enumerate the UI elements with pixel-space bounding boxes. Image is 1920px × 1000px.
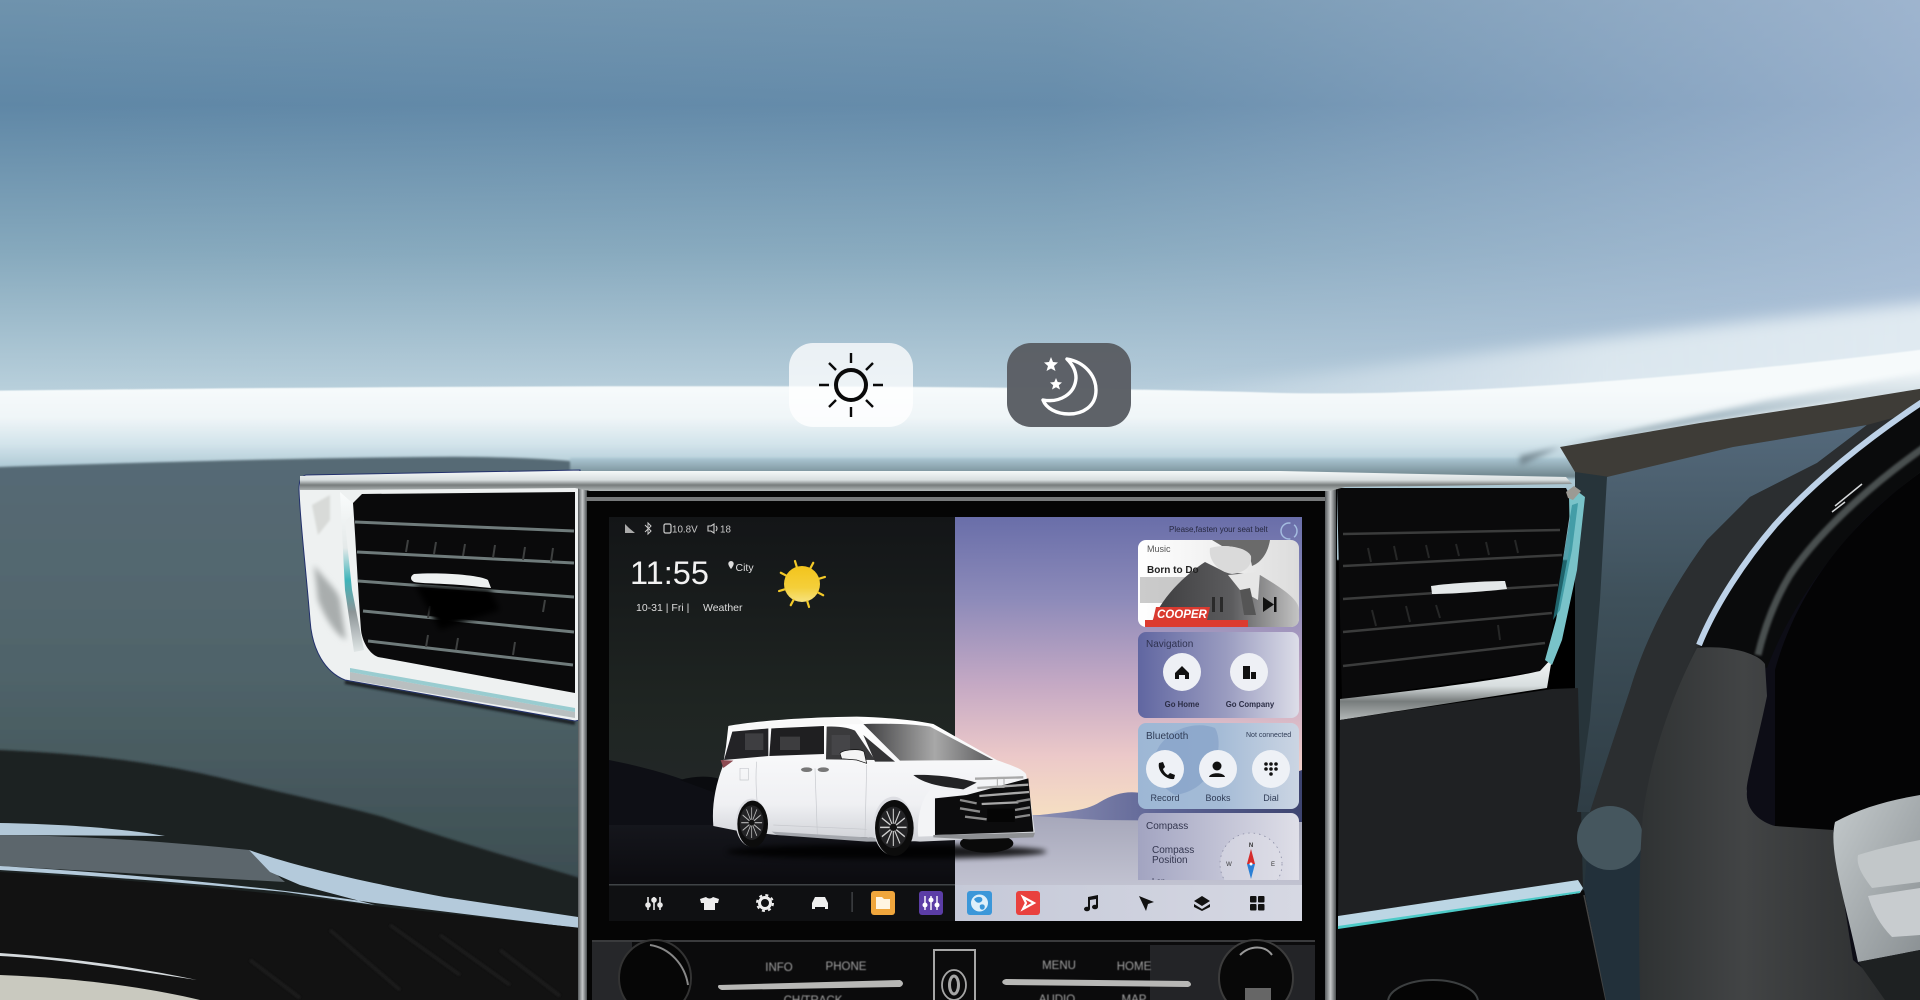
- icon: car: [812, 897, 828, 909]
- icon: weather sun: [779, 561, 825, 607]
- right knob: [1219, 940, 1293, 1000]
- small lower knob: [1388, 980, 1478, 1000]
- night mode button: [1007, 343, 1131, 427]
- car wheels: [736, 797, 914, 856]
- compass dial: [1220, 832, 1282, 880]
- sky background: [0, 0, 1920, 420]
- wheel shadow: [1590, 402, 1920, 900]
- go company button: [1226, 653, 1275, 709]
- dock: right icons: [967, 891, 1264, 915]
- icon: sun: [819, 353, 883, 417]
- chrome top strip: [300, 471, 1572, 491]
- left knob: [619, 940, 691, 1000]
- panel: compass card: Compass: [1152, 845, 1194, 856]
- icon: grid: [1250, 896, 1264, 910]
- status bar: 10.8V: [672, 524, 698, 536]
- far front wheel: [960, 834, 1013, 853]
- button labels: PHONE: [826, 961, 867, 973]
- wheel grip: [1639, 647, 1900, 1000]
- icon: navigation arrow: [1139, 896, 1154, 911]
- location: City: [736, 562, 754, 574]
- spoke chrome: [1833, 795, 1920, 962]
- left air vent: [299, 470, 580, 723]
- icon: orange files: [871, 891, 895, 915]
- status bar: 18: [720, 524, 731, 536]
- button labels: INFO: [765, 962, 793, 974]
- panel: compass card: [1138, 813, 1299, 880]
- car details: [740, 762, 867, 837]
- clock: 11:55: [630, 555, 709, 591]
- panel: bluetooth card: [1138, 723, 1299, 809]
- dashboard top surface: [0, 346, 1920, 560]
- car body: [713, 717, 1035, 842]
- panel: music card: Music: [1147, 544, 1171, 554]
- dial button: [1252, 750, 1290, 803]
- button labels: [765, 960, 1152, 1000]
- head unit frame: [578, 488, 1337, 1000]
- panel: night side: [609, 517, 955, 885]
- right chrome bar: [1002, 979, 1191, 987]
- panel: day side: [955, 517, 1302, 921]
- panel: music card: Born to Do: [1147, 565, 1199, 576]
- icon: next track: [1263, 597, 1276, 612]
- seat belt notice: [1169, 523, 1297, 539]
- icon: layers: [1194, 896, 1210, 911]
- dial button: Dial: [1263, 793, 1279, 803]
- icon: browser globe: [967, 891, 992, 915]
- Cooper logo: COOPER: [1157, 609, 1208, 621]
- panel: compass card: Position: [1152, 855, 1188, 866]
- icon: red play: [1016, 891, 1040, 915]
- album photo: [1140, 540, 1299, 627]
- bottom bar right: [955, 885, 1302, 921]
- dock: left icons: [646, 891, 943, 915]
- lower left dark trim and stripe: [0, 749, 600, 1000]
- right air vent: [1337, 486, 1585, 720]
- front grille: [913, 775, 1035, 839]
- books button: Books: [1205, 793, 1231, 803]
- icon: settings gear: [757, 895, 773, 911]
- control panel: [592, 940, 1315, 1000]
- button labels: HOME: [1117, 961, 1152, 973]
- center dash shadow strip: [570, 458, 1580, 478]
- left dashboard padding: [0, 457, 580, 1000]
- icon: equalizer: [646, 897, 662, 910]
- seat belt notice: Please,fasten your seat belt: [1169, 525, 1269, 534]
- car mirror: [840, 750, 867, 763]
- compass dial: W: [1226, 862, 1232, 868]
- icon: music note: [1084, 895, 1098, 911]
- record button: [1146, 750, 1184, 803]
- right dashboard base: [1575, 400, 1920, 1000]
- panel: bluetooth card: Bluetooth: [1146, 731, 1188, 742]
- stalk: [1577, 806, 1643, 870]
- compass dial: E: [1271, 862, 1275, 868]
- record button: Record: [1150, 793, 1180, 803]
- go company button: Go Company: [1226, 700, 1275, 709]
- go home button: [1163, 653, 1201, 709]
- right pad: [1577, 425, 1867, 812]
- icon: purple equalizer: [919, 891, 943, 915]
- day mode button: [789, 343, 913, 427]
- panel: navigation card: Navigation: [1146, 639, 1193, 650]
- car: white MPV: [713, 717, 1047, 859]
- date and weather: Weather: [703, 602, 743, 614]
- panel: compass card: Compass: [1146, 821, 1188, 832]
- status bar: [625, 523, 731, 536]
- date and weather: [636, 602, 743, 614]
- panel: bluetooth card: Not connected: [1246, 732, 1291, 739]
- right dashboard band and pad: [1520, 368, 1920, 1000]
- date and weather: 10-31 | Fri |: [636, 602, 689, 614]
- panel: navigation card: [1138, 632, 1299, 718]
- right side panels: [1336, 688, 1606, 1000]
- icon: t-shirt: [700, 897, 719, 910]
- bottom bar left: [609, 885, 955, 921]
- go home button: Go Home: [1165, 700, 1200, 709]
- steering wheel: [1577, 380, 1920, 1000]
- panel: music card: [1138, 540, 1299, 627]
- button labels: MENU: [1042, 960, 1076, 972]
- location: [728, 561, 754, 574]
- icon: moon and stars: [1043, 357, 1096, 414]
- icon: pause: [1212, 597, 1223, 612]
- center hazard button: [934, 950, 975, 1000]
- left chrome bar: [718, 980, 903, 990]
- car windows: [721, 724, 993, 768]
- panel: compass card: Lon: [1152, 877, 1165, 886]
- compass dial: N: [1249, 843, 1253, 849]
- books button: [1199, 750, 1237, 803]
- display screen: [609, 517, 1302, 921]
